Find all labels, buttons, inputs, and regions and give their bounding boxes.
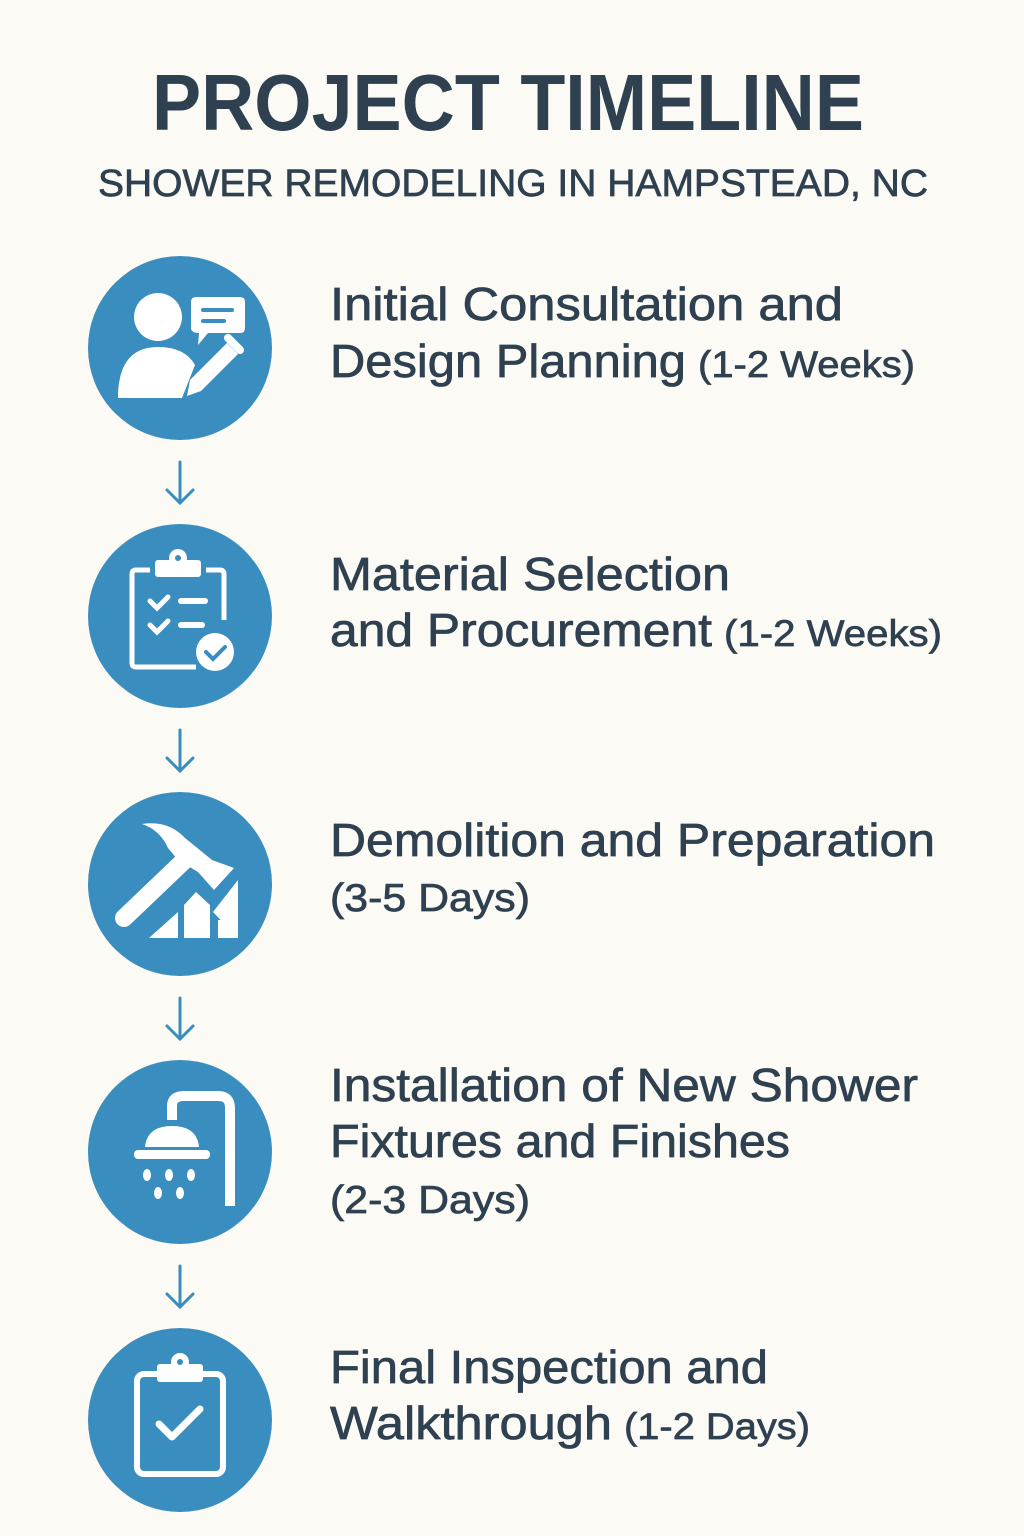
icon: hammer and broken wall xyxy=(88,792,272,976)
icon: shower xyxy=(88,1060,272,1244)
step 5: final inspection xyxy=(88,1328,810,1512)
text: step 4: Installation of New Shower xyxy=(330,1059,918,1111)
text: step 2: (1-2 Weeks) xyxy=(724,613,942,654)
step 1: consultation xyxy=(88,256,915,440)
text: step 5: Final Inspection and xyxy=(330,1341,768,1393)
text: step 4 xyxy=(330,1059,918,1222)
text: step 5: (1-2 Days) xyxy=(624,1406,810,1447)
text: step 3: Demolition and Preparation xyxy=(330,814,935,866)
icon: clipboard check xyxy=(88,1328,272,1512)
icon: clipboard checklist xyxy=(88,524,272,708)
text: step 1 xyxy=(330,278,915,387)
text: step 1: Initial Consultation and xyxy=(330,278,843,330)
arrow 3 xyxy=(167,998,193,1039)
text: step 4: (2-3 Days) xyxy=(330,1179,530,1222)
step 3: demolition xyxy=(88,792,935,976)
text: step 1: (1-2 Weeks) xyxy=(698,344,915,385)
text: step 4: Fixtures and Finishes xyxy=(330,1115,790,1167)
icon: consultation xyxy=(88,256,272,440)
text: step 1: Design Planning xyxy=(330,335,686,387)
arrow 1 xyxy=(167,462,193,503)
text: step 2: Material Selection xyxy=(330,548,730,600)
step 4: installation xyxy=(88,1059,918,1244)
step 2: materials xyxy=(88,524,942,708)
text: step 2 xyxy=(330,548,942,656)
text: step 3: (3-5 Days) xyxy=(330,877,530,920)
text: step 2: and Procurement xyxy=(330,604,712,656)
arrow 2 xyxy=(167,730,193,771)
title: PROJECT TIMELINE xyxy=(152,58,864,147)
text: step 3 xyxy=(330,814,935,920)
arrow 4 xyxy=(167,1266,193,1307)
text: step 5 xyxy=(330,1341,810,1449)
subtitle: SHOWER REMODELING IN HAMPSTEAD, NC xyxy=(98,163,928,205)
text: step 5: Walkthrough xyxy=(330,1397,612,1449)
